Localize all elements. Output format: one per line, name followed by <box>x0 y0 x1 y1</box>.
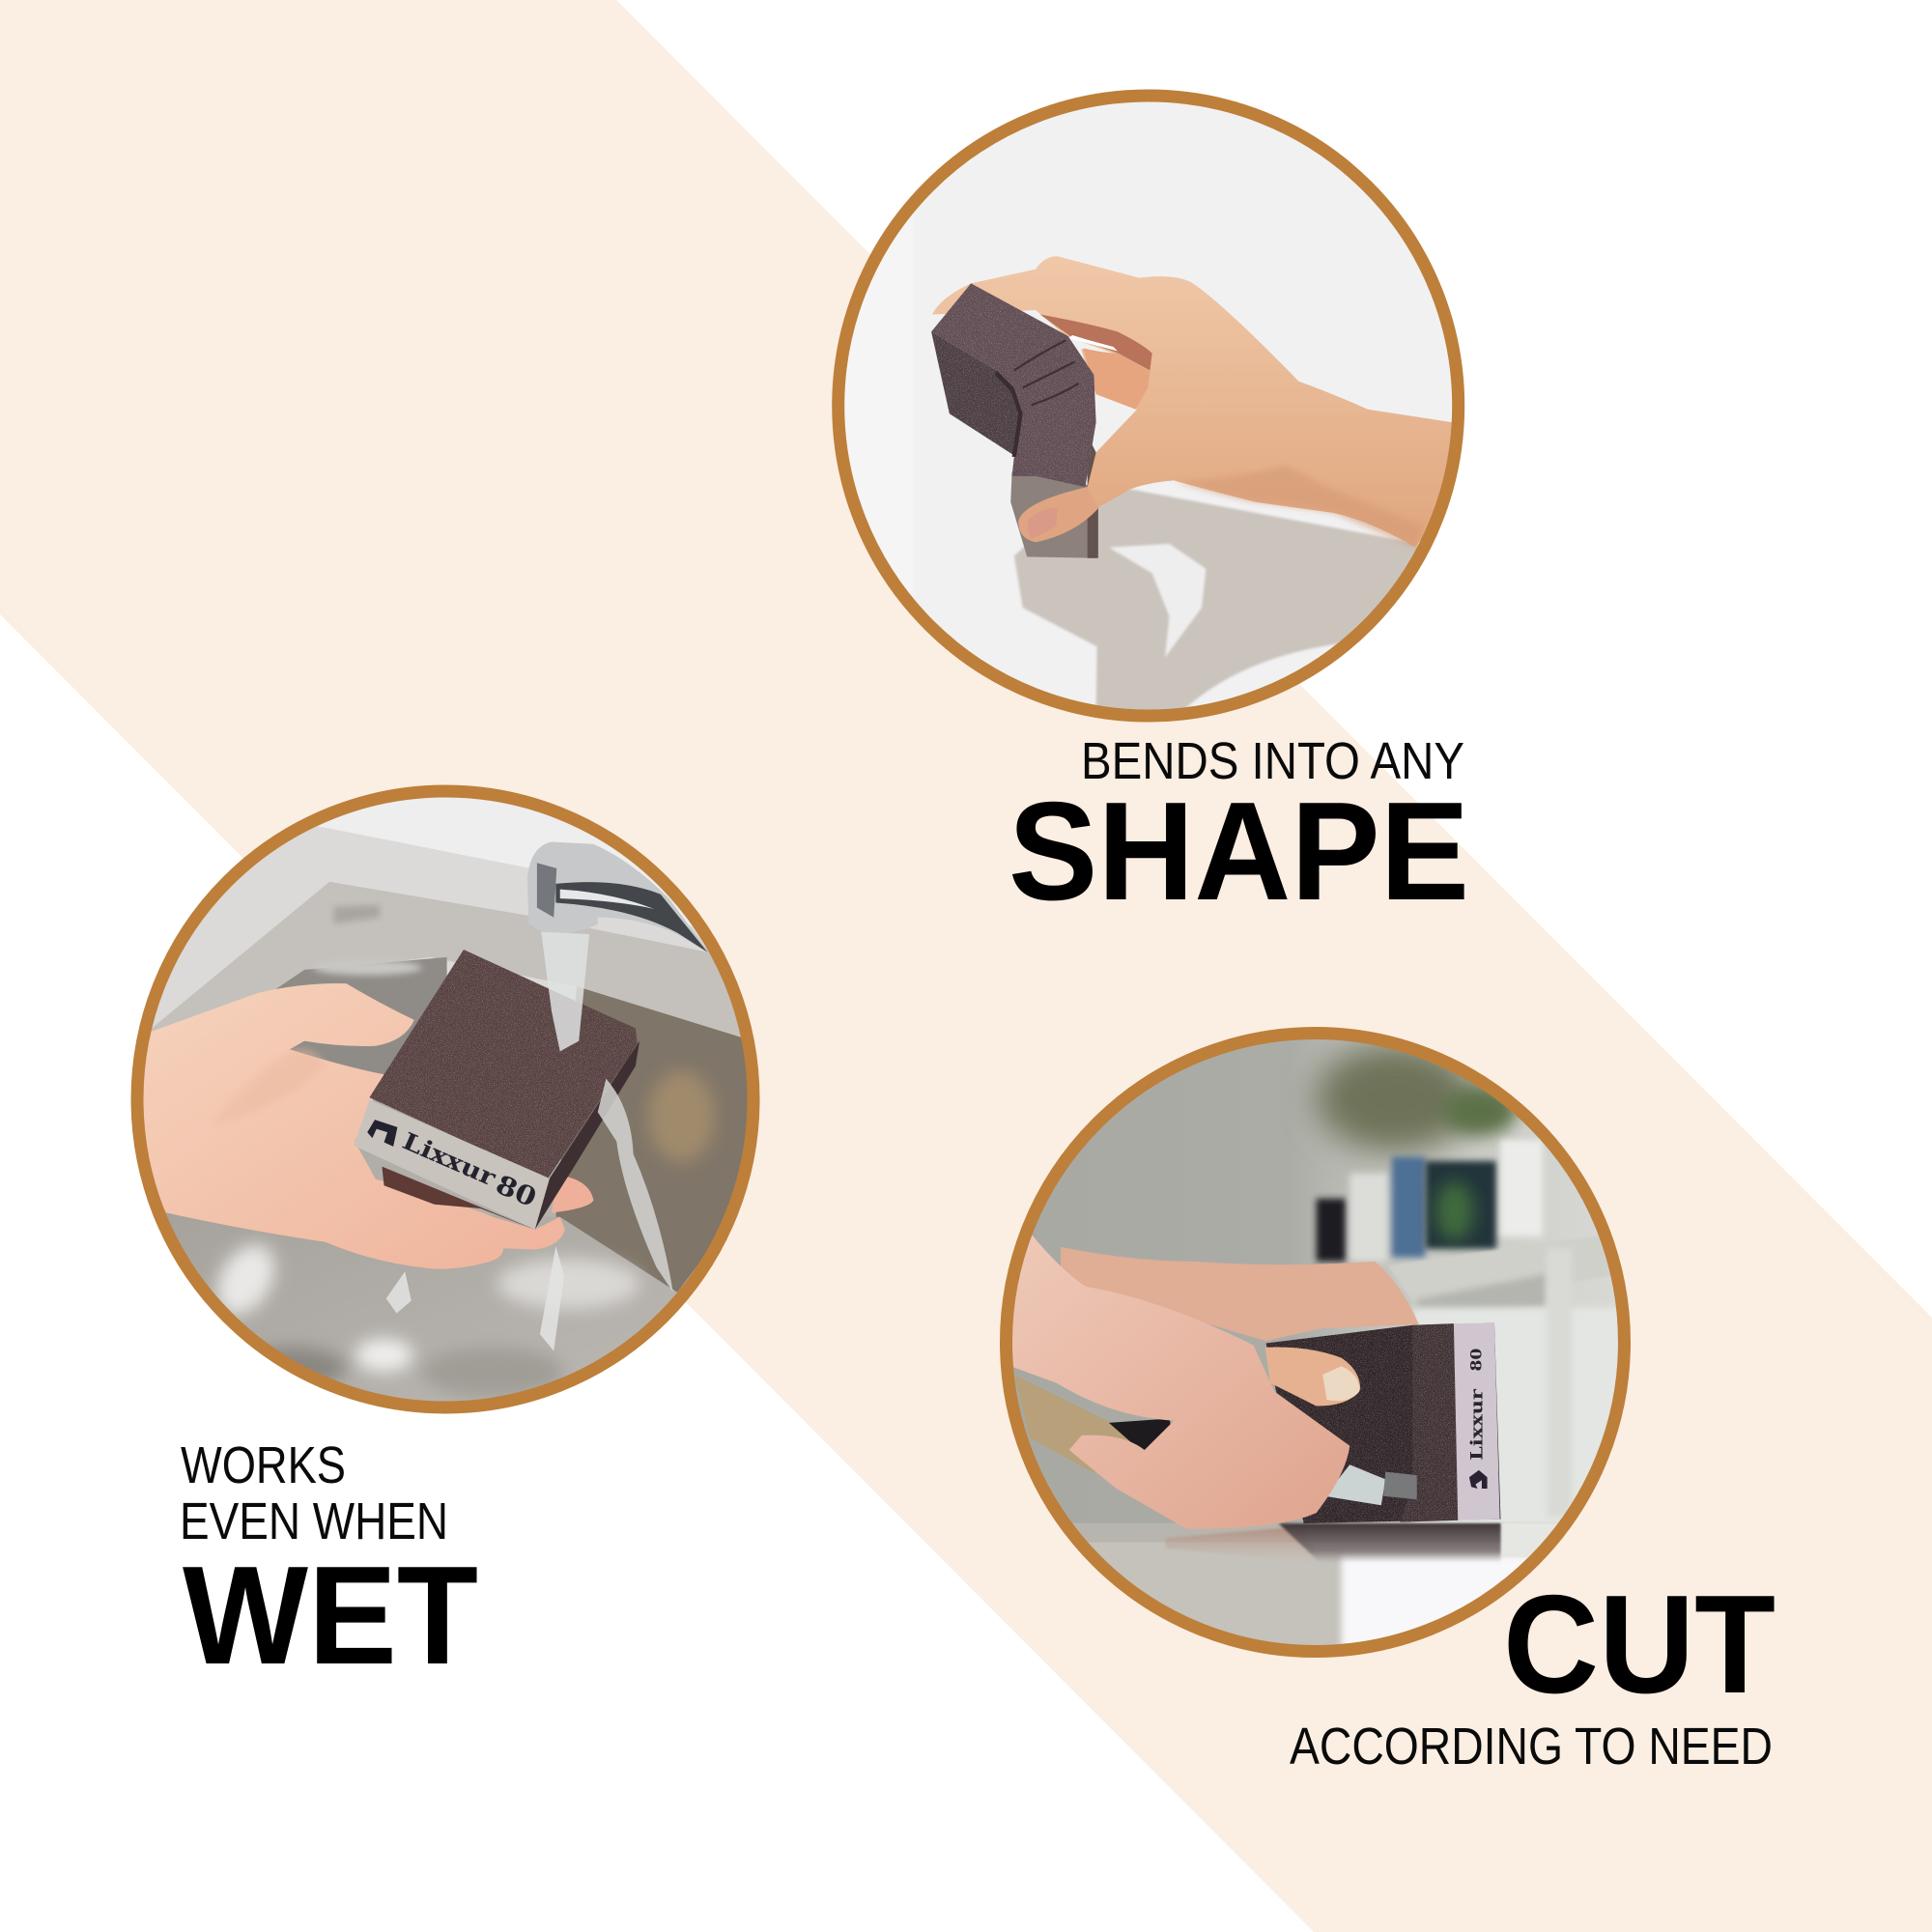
shadow on wall <box>1013 489 1419 709</box>
sponge right side <box>535 1041 639 1230</box>
sponge lower end <box>1010 471 1098 558</box>
grit number: 80 <box>491 1170 541 1213</box>
shelf <box>1390 1237 1610 1300</box>
reflection of sponge <box>1279 1523 1500 1563</box>
photo: hand bending sponge <box>844 102 1452 709</box>
heading: cut: CUT <box>1503 1566 1776 1722</box>
faucet <box>527 842 711 954</box>
hand <box>132 983 565 1269</box>
subheading: according to need: ACCORDING TO NEED <box>1290 1718 1773 1776</box>
icon: brand logo <box>1469 1470 1488 1489</box>
heading: wet: WET <box>183 1537 478 1693</box>
thumb and nail <box>1265 1347 1360 1406</box>
text block: cut according to need <box>1290 1566 1776 1776</box>
sponge brand name: Lixxur <box>1467 1389 1486 1461</box>
blurred plant <box>1317 1043 1475 1152</box>
panel: bends into any shape photo <box>832 89 1464 723</box>
subheading: works: WORKS <box>181 1436 346 1494</box>
basin right wall <box>555 986 753 1293</box>
front hand <box>1007 1235 1350 1529</box>
sponge shadow <box>382 1167 535 1230</box>
ring: bends photo border <box>838 96 1459 716</box>
panel: cut according to need photo <box>985 1014 1642 1671</box>
text block: bends into any shape <box>1009 732 1469 929</box>
ring: wet photo border <box>137 791 753 1407</box>
counter <box>152 826 709 1028</box>
knife handle and forearm <box>1014 1375 1174 1473</box>
sponge end label face <box>354 1099 550 1230</box>
ring: cut photo border <box>1007 1034 1625 1652</box>
hand <box>932 256 1454 548</box>
brand name: Lixxur <box>399 1126 501 1192</box>
table top <box>1088 1542 1501 1645</box>
sponge crease shadow <box>995 371 1023 457</box>
basin floor <box>166 1213 676 1293</box>
subheading: bends into any: BENDS INTO ANY <box>1081 732 1464 790</box>
photo: sponge under faucet <box>143 798 748 1401</box>
reflection of hand <box>1165 1527 1306 1552</box>
sponge side <box>931 331 1023 457</box>
knife blade <box>1324 1464 1385 1505</box>
photo: cutting sponge with knife <box>1012 1039 1618 1645</box>
back hand <box>1061 1247 1419 1341</box>
panel: works even when wet photo <box>116 773 773 1430</box>
sink rim <box>151 881 741 1037</box>
heading: shape: SHAPE <box>1009 773 1469 929</box>
icon: brand logo <box>367 1120 397 1147</box>
sponge body <box>1266 1323 1500 1523</box>
blurred shelf objects <box>1317 1199 1346 1262</box>
subheading: even when: EVEN WHEN <box>180 1492 448 1550</box>
sponge label face <box>1454 1323 1500 1520</box>
sponge top <box>369 950 638 1179</box>
text block: works even when wet <box>180 1436 478 1693</box>
basin back <box>276 956 447 1074</box>
sponge wrinkles <box>1014 340 1079 405</box>
sponge face <box>931 283 1096 487</box>
sponge printed brand <box>367 1120 535 1205</box>
thumb and nail <box>1018 487 1098 542</box>
water stream <box>541 932 589 1051</box>
sponge grit number: 80 <box>1467 1349 1486 1372</box>
